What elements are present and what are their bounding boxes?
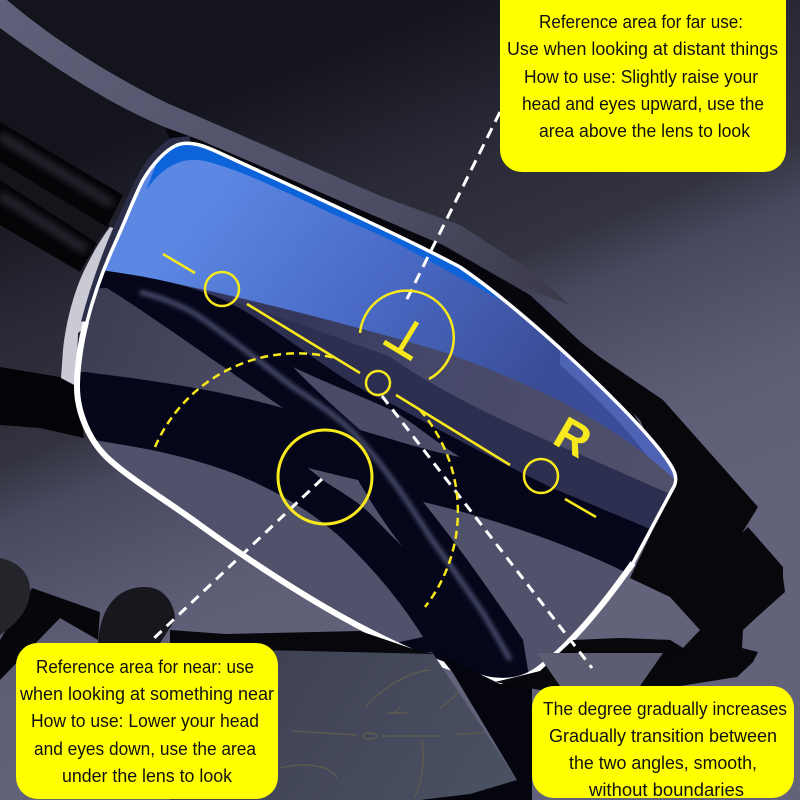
callout: gradual transition: the two angles, smooth, (569, 753, 757, 773)
callout: near use (16, 643, 278, 799)
lens white rim (77, 143, 676, 681)
dashed yellow near arc (155, 353, 458, 607)
callout: far use (500, 0, 786, 172)
callout: near use: Reference area for near: use (36, 657, 254, 677)
lens: lower right gray region (423, 502, 624, 672)
frame: right arm and hinge (520, 296, 785, 686)
callout: far use: How to use: Slightly raise your (524, 67, 758, 87)
white dashed line to gradual zone (382, 396, 592, 668)
lens: upper left gray wedge (60, 288, 283, 408)
lens: centre gray wedge (293, 367, 460, 457)
lens: lighter right sliver (560, 351, 674, 479)
frame: temple arms at left (0, 122, 123, 438)
lower scene: reflected glasses on table (0, 558, 683, 800)
frame: silver nose-side strip (61, 227, 120, 386)
lens: bright blue top strip (146, 145, 502, 300)
lens: black band (80, 270, 650, 678)
callout: far use: Reference area for far use: (539, 12, 743, 32)
lens: slate band (218, 298, 668, 528)
lens: temple highlight (140, 292, 510, 660)
callout: gradual transition (532, 686, 794, 800)
callout: near use: How to use: Lower your head (31, 711, 259, 731)
frame: dark nose bar (84, 139, 190, 322)
callout: near use: when looking at something near (19, 684, 274, 704)
callout: near use: and eyes down, use the area (34, 739, 257, 759)
far zone arc (360, 291, 454, 379)
callout: far use: Use when looking at distant things (507, 39, 778, 59)
callout: gradual transition: The degree gradually increases (543, 699, 787, 719)
white dashed line to far zone (404, 112, 500, 305)
lens (80, 145, 674, 678)
lower scene: gray triangle (537, 653, 663, 686)
near zone circle (278, 430, 372, 524)
lower scene: eyeglass pad (98, 587, 175, 643)
lower scene: pad strap (0, 588, 100, 680)
lens: lower left gray region (97, 440, 423, 642)
frame: brow bar (0, 0, 650, 440)
yellow lens axis with circles (163, 254, 596, 517)
callout: gradual transition: Gradually transition between (549, 726, 777, 746)
white dashed line to near zone (150, 479, 322, 642)
callout: gradual transition: without boundaries (588, 780, 744, 800)
callout: far use: area above the lens to look (539, 121, 751, 141)
callout: far use: head and eyes upward, use the (522, 94, 764, 114)
far zone T mark (384, 322, 417, 359)
callout: near use: under the lens to look (62, 766, 233, 786)
R mark: R (546, 406, 600, 468)
lens: gray band (105, 270, 674, 494)
lens: small wedge in near circle (308, 468, 402, 546)
